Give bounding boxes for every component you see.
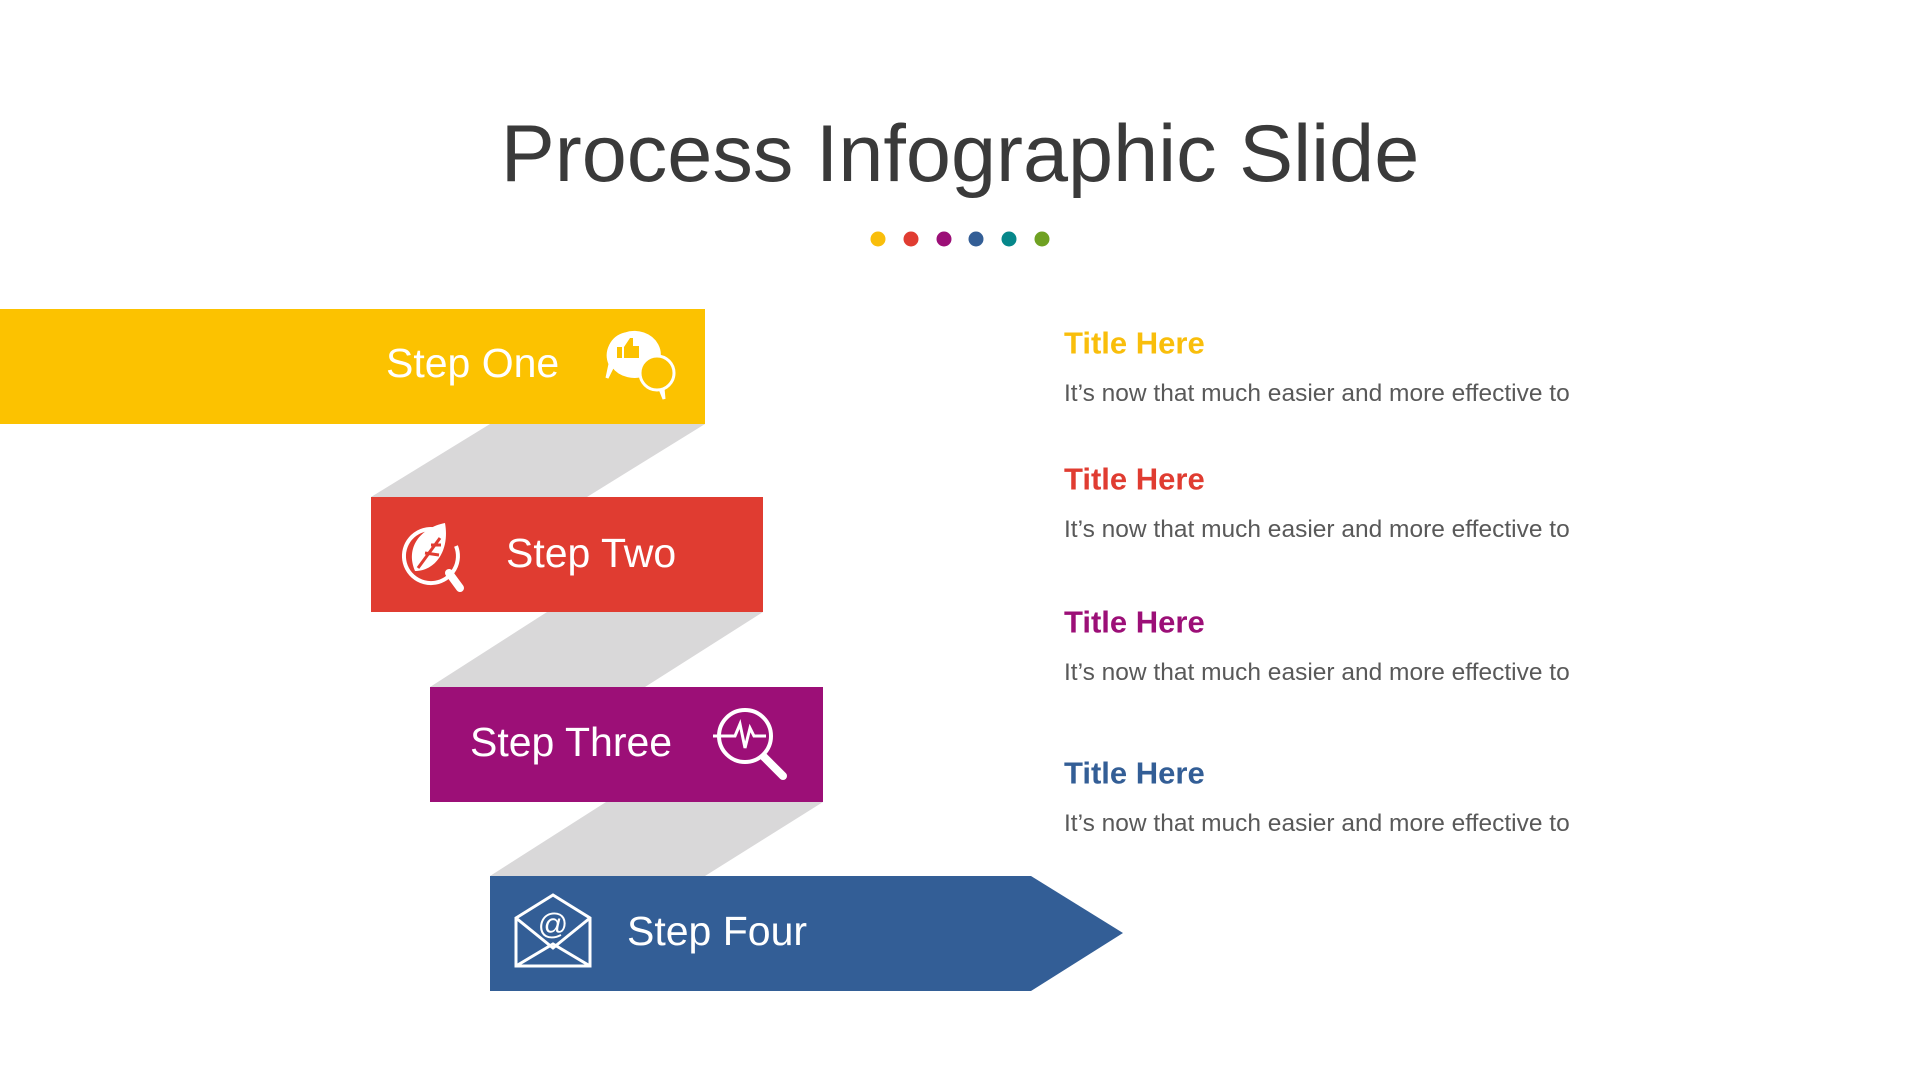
step one label: Step One — [386, 340, 559, 386]
text block 2 — [1064, 462, 1570, 543]
step two label: Step Two — [506, 530, 676, 576]
connector shadows — [371, 424, 823, 876]
text block 3 — [1064, 604, 1570, 686]
step one bar — [0, 309, 705, 424]
dots — [870, 232, 1050, 246]
text: It’s now that much easier and more effective to — [1064, 659, 1570, 686]
text: Title Here — [1064, 462, 1205, 496]
step two bar — [371, 497, 763, 612]
icon: pulse magnifier — [713, 710, 783, 776]
icon: leaf magnifier — [404, 523, 460, 588]
icon: chat thumbs up — [607, 332, 674, 399]
text block 4 — [1064, 756, 1570, 837]
step four arrow — [490, 876, 1123, 991]
text: It’s now that much easier and more effective to — [1064, 810, 1570, 837]
step four label: Step Four — [627, 908, 807, 954]
text block 1 — [1064, 326, 1570, 407]
title: Process Infographic Slide — [501, 109, 1419, 199]
text: Title Here — [1064, 604, 1205, 640]
icon: email envelope — [516, 895, 590, 966]
text: Title Here — [1064, 326, 1205, 360]
text: Title Here — [1064, 756, 1205, 790]
step three label: Step Three — [470, 719, 672, 765]
text: It’s now that much easier and more effective to — [1064, 516, 1570, 543]
icon: email envelope: @ — [538, 908, 568, 941]
step three bar — [430, 687, 823, 802]
text: It’s now that much easier and more effective to — [1064, 380, 1570, 407]
